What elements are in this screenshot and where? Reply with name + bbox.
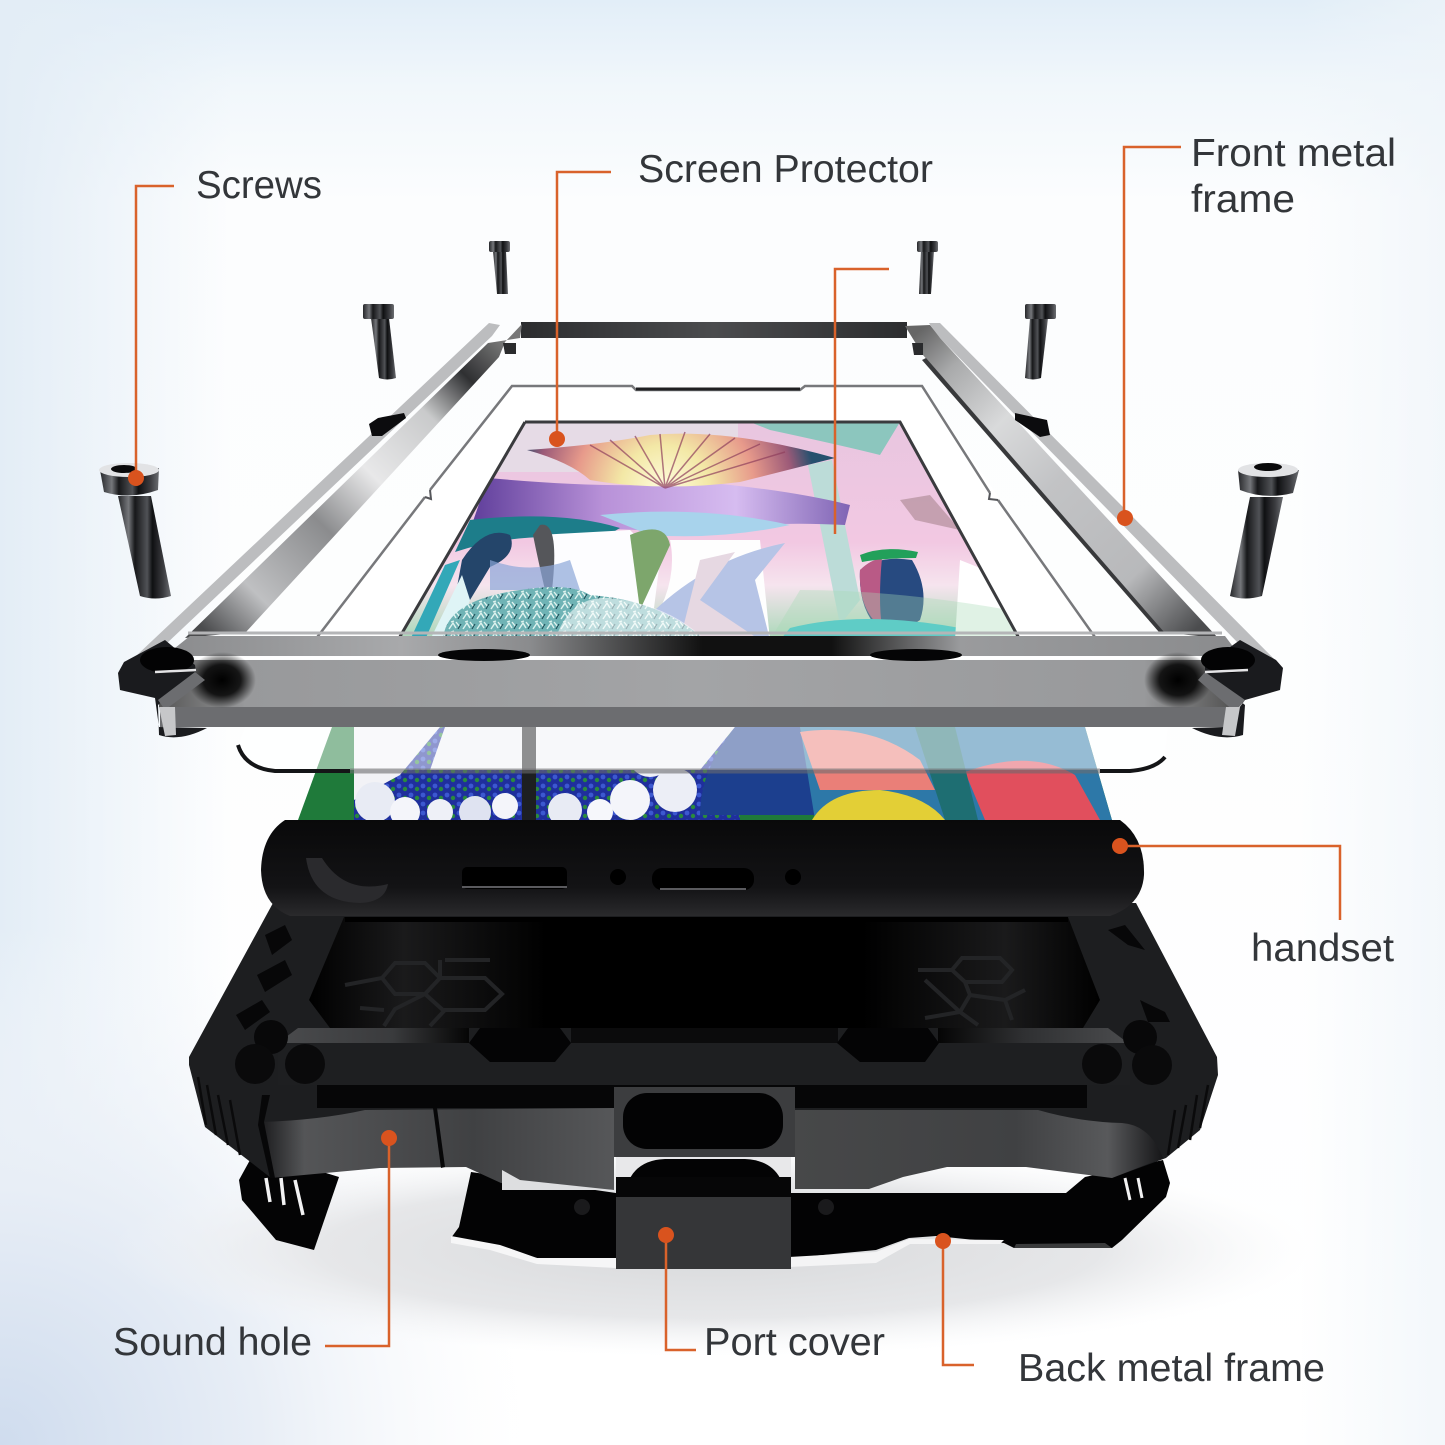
label: Sound hole: Sound hole [113, 1321, 312, 1364]
white stalk area [552, 530, 659, 608]
right reflection [955, 560, 1016, 636]
right outer rail [929, 323, 1283, 672]
honeycomb right [918, 958, 1025, 1025]
handset screen [298, 727, 1112, 828]
label: Port cover: Port cover [704, 1321, 885, 1364]
front shelf [278, 1028, 469, 1043]
coral [443, 587, 705, 640]
port cover [616, 1159, 791, 1269]
back metal frame [239, 1160, 1170, 1268]
right corner [1192, 640, 1283, 737]
label: Front metal frame: frame [1191, 178, 1295, 221]
front screen picture [398, 422, 1020, 640]
left corner [118, 640, 207, 737]
left bud [455, 533, 512, 600]
screen protector glass [238, 727, 1168, 771]
port frame [614, 1087, 795, 1157]
glass protector panel [315, 386, 1097, 640]
front metal frame [118, 322, 1283, 737]
case body [189, 903, 1218, 1190]
side tabs [369, 413, 1050, 437]
icon: screws [99, 241, 1299, 598]
inner tub [309, 917, 1100, 1028]
main bar [159, 660, 1230, 708]
left outer rail [118, 323, 500, 673]
gaps [502, 1170, 614, 1190]
screen inner border [398, 422, 1020, 640]
label: Back metal frame: Back metal frame [1018, 1347, 1325, 1390]
honeycomb left [345, 960, 502, 1026]
label: Screws: Screws [196, 164, 322, 207]
lip strip [165, 636, 1240, 656]
shadow blobs [188, 652, 256, 708]
label: Screen Protector: Screen Protector [638, 148, 933, 191]
label: handset: handset [1251, 927, 1394, 970]
poppy pod [860, 559, 924, 630]
lotus leaf [474, 478, 850, 530]
callout lines and dots [128, 147, 1340, 1365]
screw holes [254, 1020, 288, 1054]
handset [261, 820, 1144, 916]
flower stem [808, 460, 860, 625]
left inner rail [185, 324, 522, 638]
front wall left [262, 1108, 614, 1190]
front wall right [795, 1110, 1163, 1189]
label: Front metal frame: Front metal [1191, 132, 1396, 175]
side notches [236, 925, 292, 1030]
right inner rail [905, 325, 1218, 638]
fan flower [527, 434, 835, 487]
ribbed edges [198, 1077, 1208, 1155]
